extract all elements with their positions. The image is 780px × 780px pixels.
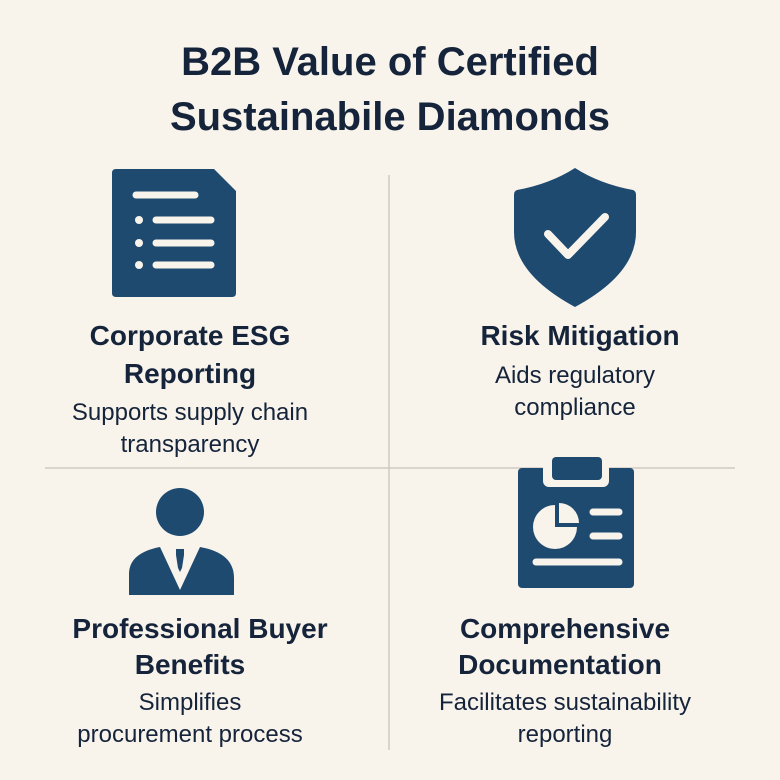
text: corporate ESG: transparency <box>121 431 259 458</box>
text: comprehensive documentation <box>439 613 691 748</box>
text: corporate ESG: Reporting <box>124 358 256 389</box>
text: comprehensive documentation: reporting <box>518 721 612 748</box>
text: comprehensive documentation: Comprehensive <box>460 613 670 644</box>
icon: clipboard <box>518 454 634 588</box>
text: comprehensive documentation: Documentation <box>458 649 662 680</box>
icon: shield <box>514 168 636 307</box>
text: risk mitigation: compliance <box>514 394 636 421</box>
text: professional buyer: procurement process <box>77 721 303 748</box>
text: risk mitigation <box>480 320 680 421</box>
title: B2B Value of Certified <box>181 40 599 84</box>
text: professional buyer: Benefits <box>135 649 245 680</box>
text: corporate ESG: Supports supply chain <box>72 399 308 426</box>
text: risk mitigation: Risk Mitigation <box>480 320 680 351</box>
text: professional buyer <box>72 613 328 748</box>
title: Sustainabile Diamonds <box>170 95 610 139</box>
icon: document <box>112 169 236 297</box>
text: professional buyer: Simplifies <box>139 689 241 716</box>
title <box>170 40 610 139</box>
text: professional buyer: Professional Buyer <box>72 613 328 644</box>
text: risk mitigation: Aids regulatory <box>495 362 655 389</box>
text: corporate ESG <box>72 320 308 458</box>
text: corporate ESG: Corporate ESG <box>90 320 290 351</box>
text: comprehensive documentation: Facilitates sustainability <box>439 689 691 716</box>
icon: person <box>129 488 234 595</box>
